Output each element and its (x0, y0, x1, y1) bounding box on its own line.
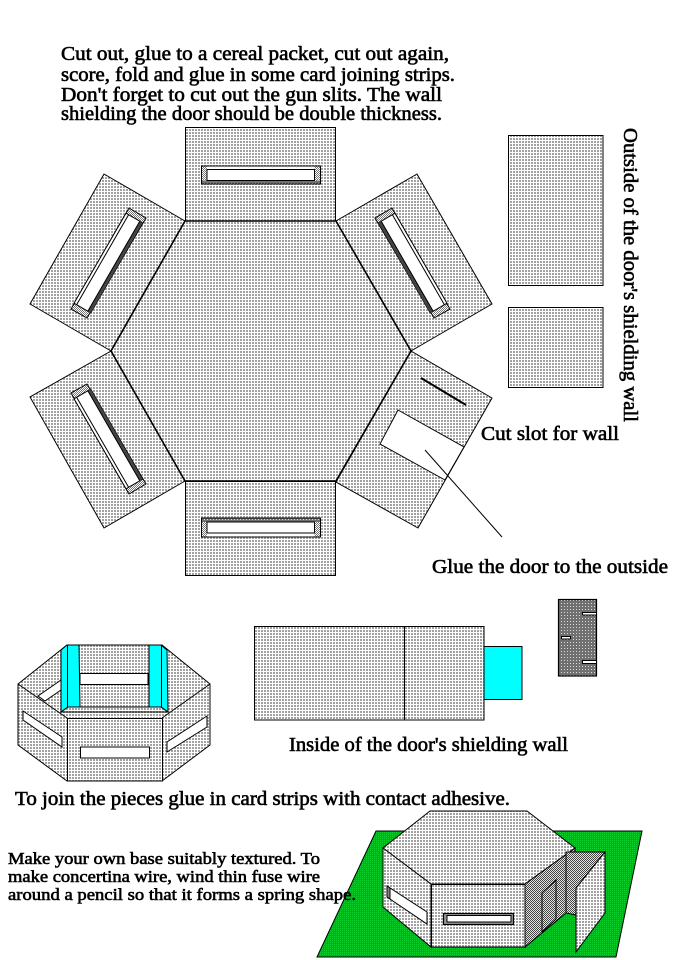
flap: lower right with door opening (336, 351, 492, 528)
flap: bottom (186, 482, 336, 576)
finished bunker on green base (317, 811, 642, 957)
panel: outside wall upper (508, 136, 603, 286)
flap: upper left (30, 174, 185, 351)
cyan strip right (149, 645, 168, 712)
front face (432, 884, 526, 947)
door opening (380, 410, 464, 480)
heading: instructions: shielding the door should be double thickness. (61, 104, 442, 125)
note: base and wire: Make your own base suitably textured. To (8, 849, 320, 868)
panel: inside of shielding wall (254, 626, 522, 720)
label: outside of the door's shielding wall: Outside of the door's shielding wall (619, 128, 640, 423)
cyan glue tab (484, 646, 522, 700)
green base (317, 831, 642, 957)
roof (383, 811, 575, 884)
flap: lower left (30, 351, 185, 528)
panel: outside wall lower (508, 308, 603, 388)
slot for wall (421, 378, 466, 405)
hexagon net (30, 128, 492, 576)
cyan strip left (61, 645, 80, 712)
hexagon base (111, 221, 411, 481)
note: base and wire (8, 849, 356, 904)
right face with door (525, 848, 575, 947)
heading: instructions: Cut out, glue to a cereal packet, cut out again, (61, 44, 449, 65)
shielding wall (566, 852, 605, 952)
flap: upper right (336, 174, 492, 351)
heading: instructions: Don't forget to cut out the gun slits. The wall (61, 85, 443, 106)
pointer line to door (425, 450, 502, 537)
label: glue door: Glue the door to the outside (432, 557, 668, 578)
label: join pieces: To join the pieces glue in card strips with contact adhesive. (15, 789, 510, 810)
heading: instructions: score, fold and glue in some card joining strips. (61, 65, 455, 86)
label: inside wall: Inside of the door's shielding wall (289, 735, 569, 756)
label: cut slot: Cut slot for wall (481, 424, 620, 445)
flap: top (186, 128, 336, 222)
assembled open model (18, 645, 210, 781)
note: base and wire: make concertina wire, wind thin fuse wire (8, 867, 320, 886)
door piece (558, 600, 596, 676)
heading: instructions (61, 44, 455, 125)
left face (383, 848, 431, 947)
note: base and wire: around a pencil so that it forms a spring shape. (8, 885, 356, 904)
